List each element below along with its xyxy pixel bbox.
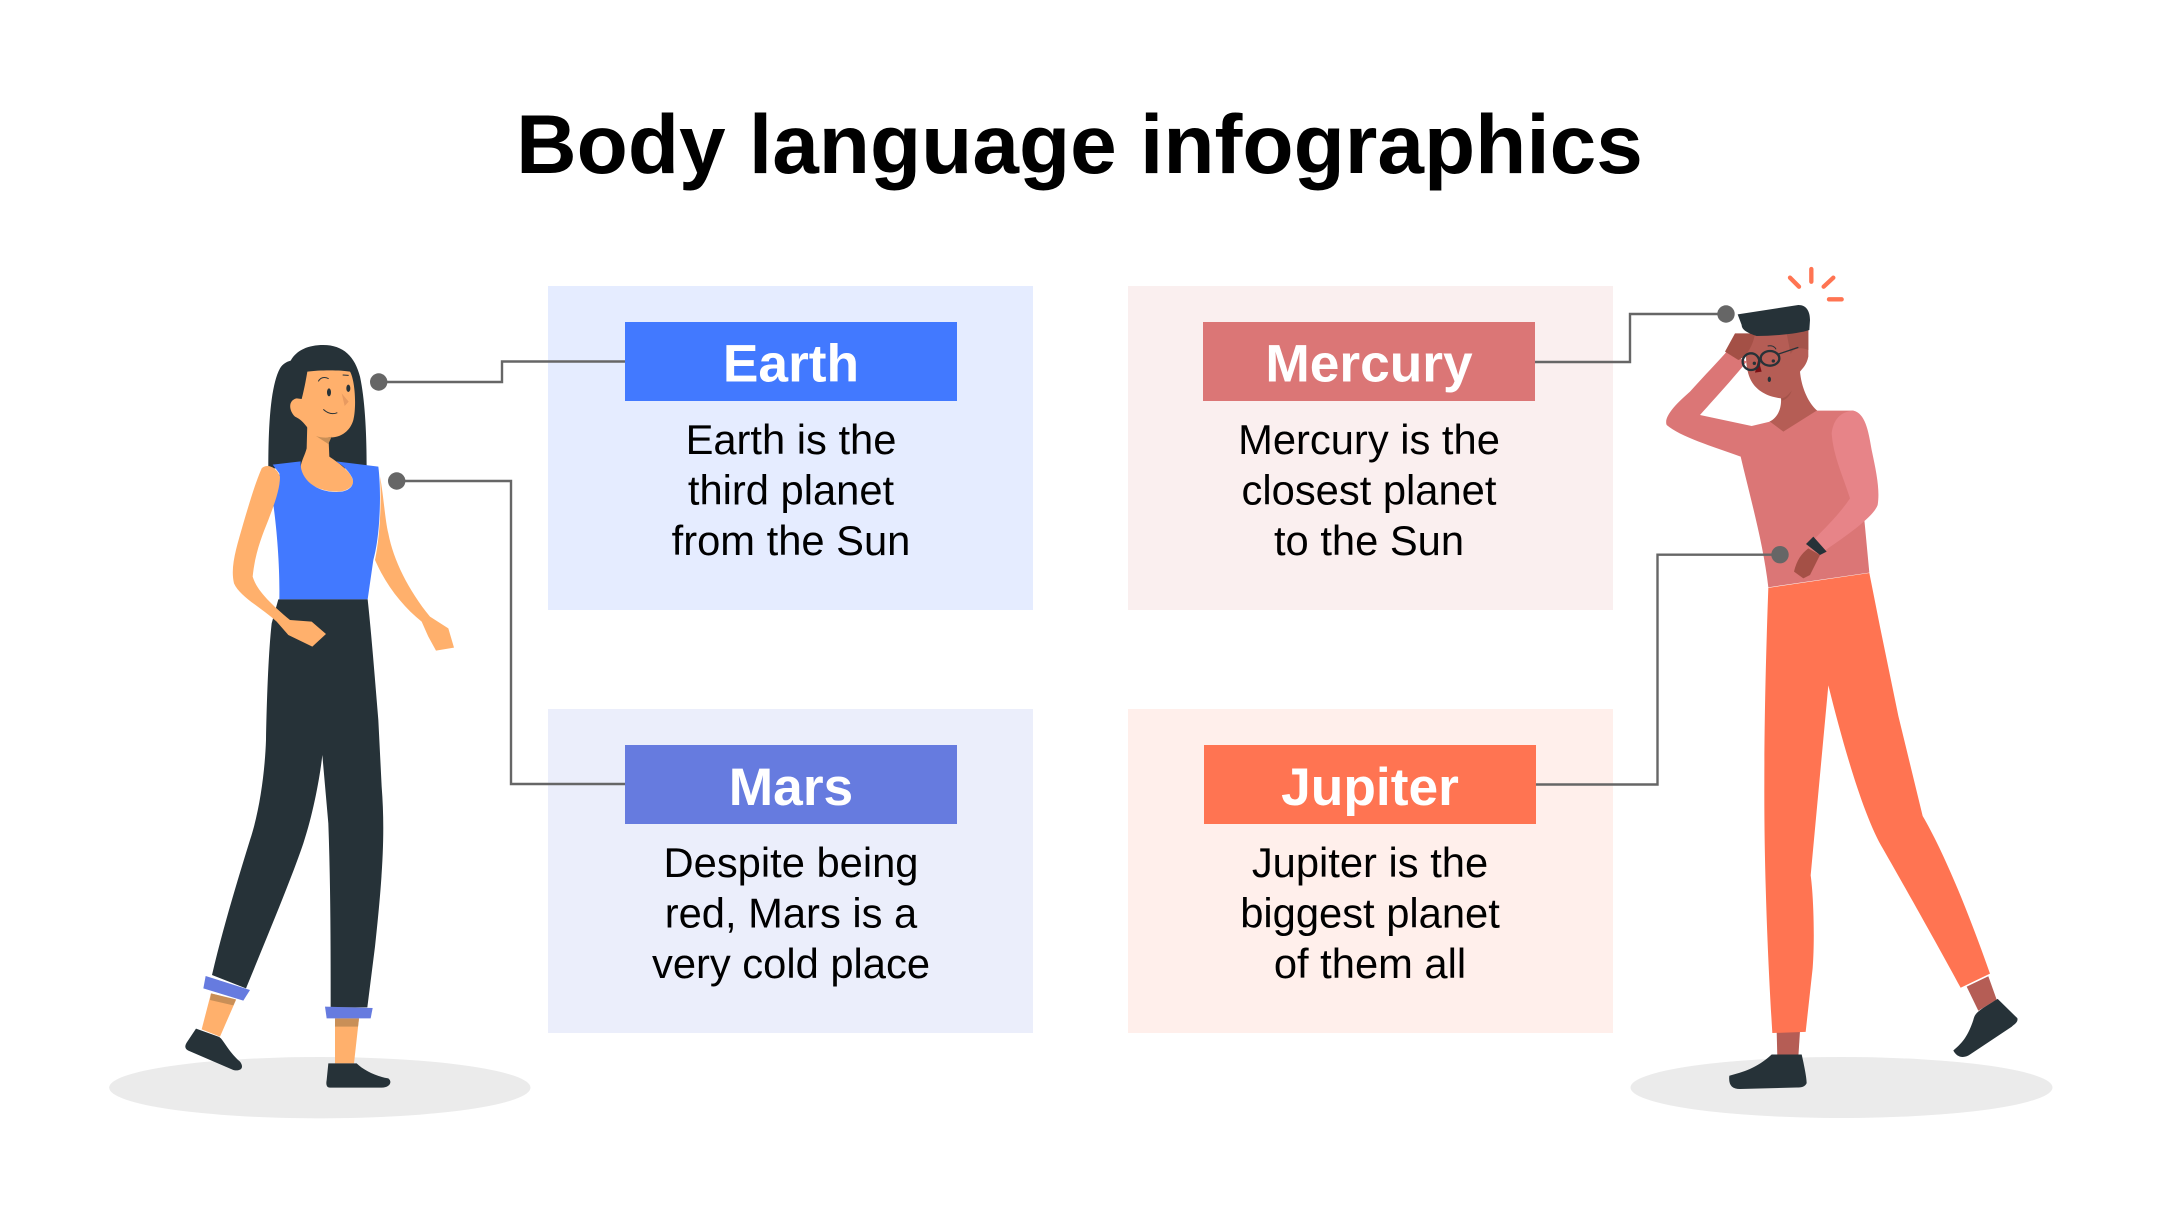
sideburn and ear bbox=[1787, 328, 1808, 354]
text: Mercury description: closest planet bbox=[1242, 466, 1497, 514]
shoes bbox=[185, 1029, 390, 1088]
text: Earth description: third planet bbox=[688, 466, 895, 514]
text: Mercury description: Mercury is the bbox=[1238, 416, 1500, 463]
heading: Earth bbox=[625, 322, 957, 401]
text: Earth description: from the Sun bbox=[672, 517, 910, 564]
connector: Mars bbox=[388, 472, 625, 784]
right arm bbox=[375, 477, 454, 651]
hair bbox=[268, 345, 367, 468]
head and neck bbox=[1746, 328, 1817, 433]
cuffs and ankles bbox=[202, 976, 373, 1063]
face bbox=[290, 370, 355, 437]
face details bbox=[1743, 346, 1798, 401]
figure: woman bbox=[109, 345, 530, 1118]
connector: Earth bbox=[370, 362, 625, 391]
heading: Jupiter bbox=[1204, 745, 1536, 824]
panel: Jupiter bbox=[1128, 709, 1613, 1033]
facial features bbox=[318, 375, 350, 414]
top bbox=[273, 461, 380, 599]
hand and watch bbox=[1794, 548, 1820, 578]
heading: Mars bbox=[625, 745, 957, 824]
sleeve bbox=[1813, 411, 1878, 552]
surprise sparks bbox=[1790, 269, 1842, 299]
text: Mars description: very cold place bbox=[652, 940, 930, 987]
panel: Mars bbox=[548, 709, 1033, 1033]
text: Jupiter description: of them all bbox=[1274, 940, 1466, 987]
text: Jupiter description: biggest planet bbox=[1240, 890, 1500, 936]
shadow: woman bbox=[109, 1057, 530, 1118]
heading: Mars: Mars bbox=[729, 758, 853, 817]
pants bbox=[212, 599, 383, 1007]
heading: Mercury bbox=[1203, 322, 1535, 401]
title: Body language infographics bbox=[516, 97, 1643, 191]
shirt with raised arm bbox=[1666, 352, 1869, 587]
neck and chest bbox=[301, 423, 353, 492]
hair bbox=[1738, 305, 1810, 336]
neck shadow bbox=[316, 436, 332, 444]
text: Mars description: Despite being bbox=[664, 839, 918, 886]
connector: Mercury bbox=[1535, 305, 1735, 362]
heading: Earth: Earth bbox=[723, 334, 859, 394]
figure: man bbox=[1630, 269, 2052, 1118]
panel: Mercury bbox=[1128, 286, 1613, 610]
connector: Jupiter bbox=[1536, 546, 1789, 784]
fist bbox=[1725, 333, 1755, 360]
heading: Jupiter: Jupiter bbox=[1281, 758, 1459, 817]
heading: Mercury: Mercury bbox=[1265, 334, 1473, 394]
text: Earth description: Earth is the bbox=[686, 416, 896, 463]
upper body bbox=[1666, 269, 1878, 587]
text: Mercury description: to the Sun bbox=[1274, 517, 1464, 564]
shadow: man bbox=[1630, 1057, 2052, 1118]
text: Jupiter description: Jupiter is the bbox=[1252, 839, 1488, 886]
panel: Earth bbox=[548, 286, 1033, 610]
text: Mars description: red, Mars is a bbox=[665, 890, 918, 936]
legs and shoes bbox=[1729, 573, 2018, 1089]
left arm bbox=[233, 466, 326, 647]
